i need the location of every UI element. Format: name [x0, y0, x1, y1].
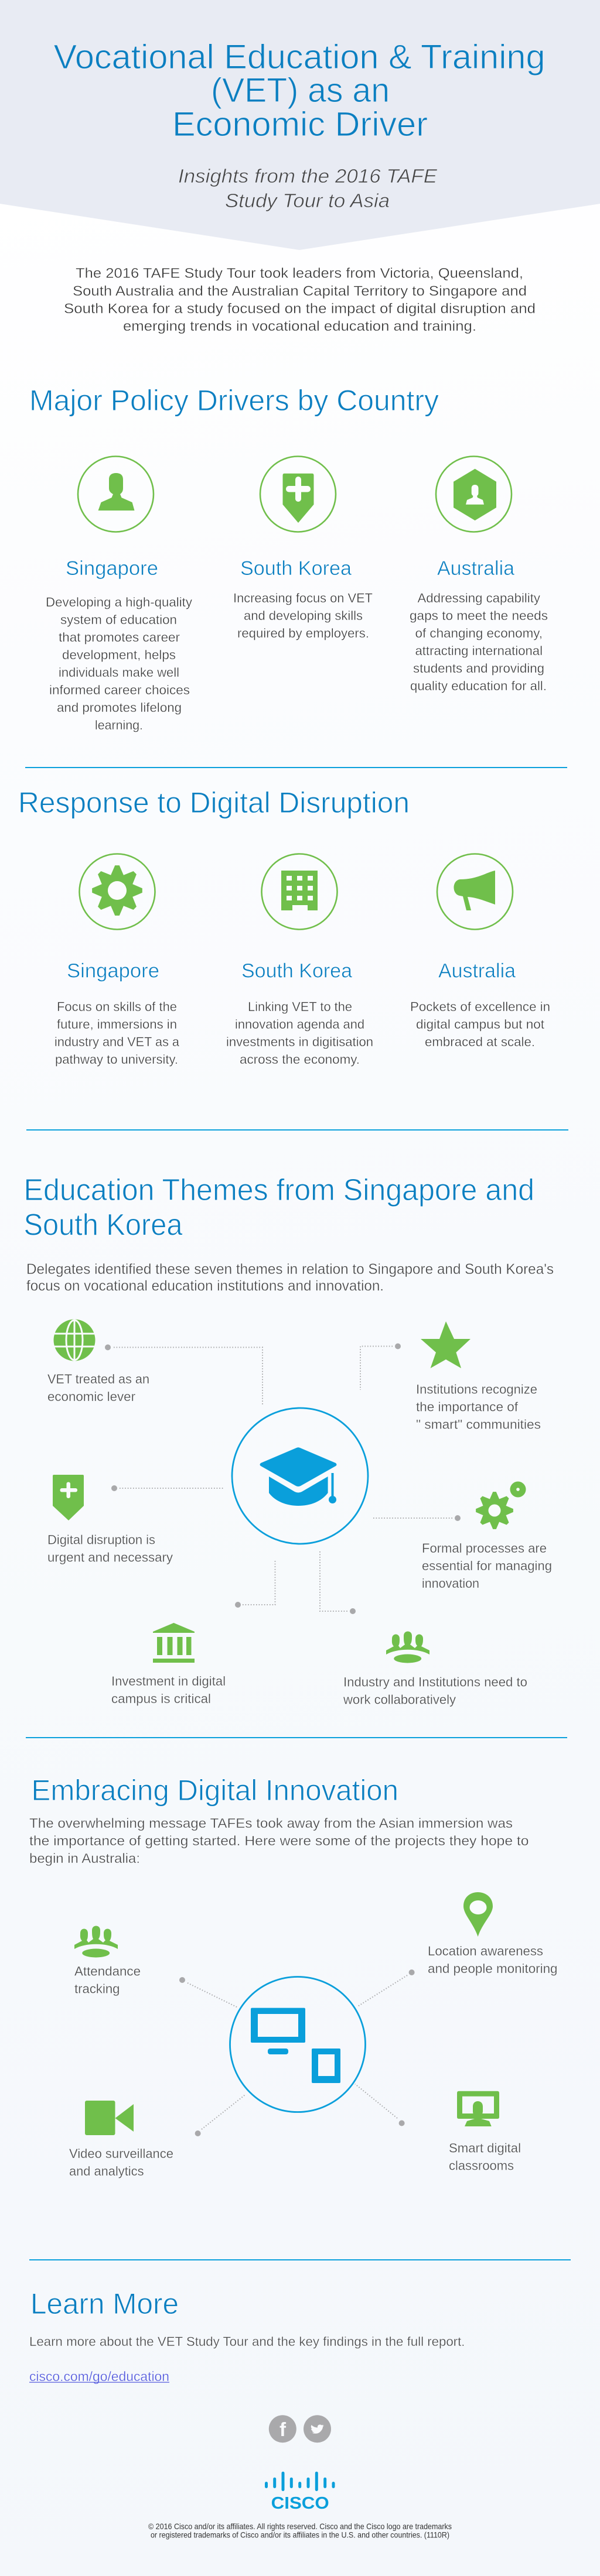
theme: digital campus: campus is critical [111, 1691, 211, 1706]
icon: gear in circle [80, 854, 155, 930]
panel: learn more [29, 2287, 465, 2540]
column: South Korea: across the economy. [240, 1052, 360, 1067]
icon: hexagon person in circle [436, 457, 512, 532]
theme: formal processes [373, 1481, 552, 1591]
theme: smart communities: Institutions recognize [416, 1382, 537, 1397]
icon: facebook: f [279, 2419, 287, 2440]
intro text: begin in Australia: [29, 1851, 140, 1866]
column: South Korea: required by employers. [237, 626, 369, 640]
column: Singapore: industry and VET as a [54, 1034, 180, 1049]
theme: smart communities: " smart" communities [416, 1417, 541, 1432]
panel: embracing digital innovation [29, 1774, 558, 2178]
icon: person in circle [78, 457, 154, 532]
icon: bank building [153, 1623, 195, 1663]
cisco logo [265, 2472, 335, 2513]
icon: star [421, 1321, 471, 1368]
heading [23, 1173, 534, 1242]
theme: collaboration: Industry and Institutions need to [343, 1674, 527, 1690]
link: cisco.com/go/education [29, 2369, 169, 2384]
item: location awareness [357, 1892, 558, 2006]
icon: facebook [269, 2415, 296, 2443]
heading: Major Policy Drivers by Country [29, 384, 439, 417]
column: South Korea: and developing skills [244, 608, 363, 623]
theme: smart communities [360, 1321, 541, 1432]
intro paragraph: South Australia and the Australian Capital Territory to Singapore and [73, 283, 527, 299]
column: Australia: of changing economy, [415, 626, 543, 640]
column: Australia: Australia [437, 557, 514, 580]
theme: collaboration: work collaboratively [343, 1692, 456, 1707]
heading: South Korea [23, 1208, 183, 1242]
column: South Korea: innovation agenda and [235, 1017, 364, 1032]
icon: building in circle [261, 854, 338, 930]
copyright [148, 2522, 452, 2540]
center circle with graduation cap [232, 1408, 368, 1544]
theme: digital campus [111, 1561, 275, 1706]
icon: shield plus [53, 1475, 84, 1520]
panel: major policy drivers by country [29, 384, 548, 732]
item: smart classrooms [355, 2084, 521, 2173]
item: location awareness: and people monitoring [428, 1961, 558, 1976]
column: Singapore: Singapore [67, 960, 159, 982]
item: video surveillance [69, 2095, 246, 2178]
theme: formal processes: innovation [422, 1576, 479, 1591]
icon: twitter [304, 2415, 331, 2443]
column: Australia: Australia [438, 960, 516, 982]
column: Singapore: Focus on skills of the [57, 999, 177, 1014]
column: Singapore: Singapore [66, 557, 158, 580]
center circle with devices [230, 1976, 366, 2112]
icon: map pin [463, 1892, 493, 1937]
column: Australia [410, 960, 550, 1049]
icon: presenter on screen [457, 2091, 499, 2126]
theme: digital campus: Investment in digital [111, 1674, 226, 1688]
column: Singapore: learning. [95, 718, 143, 732]
item: smart classrooms: classrooms [449, 2158, 514, 2173]
column: Singapore: that promotes career [59, 630, 180, 645]
subtitle [178, 165, 438, 211]
column: Singapore: future, immersions in [57, 1017, 177, 1032]
copyright: or registered trademarks of Cisco and/or its affiliates in the U.S. and other countries. (1110R) [151, 2530, 449, 2540]
theme: collaboration [320, 1551, 527, 1707]
theme: formal processes: essential for managing [422, 1558, 552, 1573]
column: South Korea: South Korea [241, 960, 352, 982]
item: attendance tracking [74, 1926, 237, 2008]
theme: economic lever: economic lever [47, 1389, 135, 1404]
column: South Korea: Increasing focus on VET [233, 591, 373, 605]
column: Australia: embraced at scale. [425, 1034, 535, 1049]
column: South Korea: investments in digitisation [226, 1034, 373, 1049]
icon: people around table [386, 1631, 429, 1663]
title [54, 38, 545, 143]
column: Australia: Pockets of excellence in [410, 999, 550, 1014]
intro text [29, 1815, 529, 1866]
column: South Korea: South Korea [240, 557, 352, 580]
intro paragraph: South Korea for a study focused on the impact of digital disruption and [64, 301, 536, 317]
column: Singapore: Developing a high-quality [46, 595, 192, 609]
theme: formal processes: Formal processes are [422, 1541, 547, 1556]
column: Singapore: system of education [60, 612, 177, 627]
intro paragraph: emerging trends in vocational education and training. [123, 318, 476, 334]
column: Singapore: individuals make well [59, 665, 179, 680]
column: Australia: attracting international [415, 643, 543, 658]
icon: video camera [85, 2101, 134, 2135]
copyright: © 2016 Cisco and/or its affiliates. All rights reserved. Cisco and the Cisco logo are trademarks [148, 2522, 452, 2531]
column: Singapore: pathway to university. [55, 1052, 178, 1067]
item: smart classrooms: Smart digital [449, 2140, 521, 2156]
theme: smart communities: the importance of [416, 1399, 519, 1414]
intro paragraph: The 2016 TAFE Study Tour took leaders from Victoria, Queensland, [76, 266, 523, 281]
icon: megaphone in circle [437, 854, 513, 930]
intro text: The overwhelming message TAFEs took away from the Asian immersion was [29, 1815, 513, 1831]
icon: shield plus in circle [260, 457, 336, 532]
intro text: focus on vocational education institutions and innovation. [26, 1277, 384, 1294]
column: Australia: gaps to meet the needs [410, 608, 548, 623]
column: South Korea [233, 557, 373, 640]
cisco logo: CISCO [271, 2494, 329, 2513]
column: Singapore: and promotes lifelong [57, 700, 182, 715]
intro text: Delegates identified these seven themes in relation to Singapore and South Korea's [26, 1261, 554, 1277]
title: (VET) as an [211, 71, 390, 109]
intro paragraph [64, 266, 536, 334]
item: location awareness: Location awareness [428, 1944, 543, 1958]
icon: globe [54, 1320, 95, 1361]
column: South Korea [226, 960, 373, 1067]
column: Singapore: development, helps [62, 648, 176, 662]
title: Economic Driver [172, 105, 428, 143]
theme: economic lever: VET treated as an [47, 1372, 149, 1386]
column: Australia: digital campus but not [416, 1017, 544, 1032]
icon: people around table [74, 1926, 118, 1958]
heading: Response to Digital Disruption [18, 786, 410, 819]
column: Australia: Addressing capability [417, 591, 540, 605]
theme: digital disruption: urgent and necessary [47, 1550, 173, 1564]
panel: header banner [0, 0, 600, 250]
theme: economic lever [47, 1320, 262, 1405]
column: Australia: quality education for all. [410, 679, 547, 693]
heading: Education Themes from Singapore and [23, 1173, 534, 1207]
text: Learn more about the VET Study Tour and the key findings in the full report. [29, 2334, 465, 2349]
panel: response to digital disruption [18, 786, 550, 1067]
column: Australia: students and providing [413, 661, 544, 676]
heading: Embracing Digital Innovation [32, 1774, 398, 1807]
item: attendance tracking: Attendance [74, 1964, 141, 1979]
theme: digital disruption: Digital disruption is [47, 1533, 155, 1547]
subtitle: Study Tour to Asia [225, 190, 390, 211]
item: video surveillance: Video surveillance [69, 2146, 173, 2161]
item: attendance tracking: tracking [74, 1981, 120, 1996]
column: Australia [410, 557, 548, 693]
theme: digital disruption [47, 1475, 223, 1564]
intro text [26, 1261, 554, 1294]
item: video surveillance: and analytics [69, 2164, 144, 2178]
column: Singapore [46, 557, 192, 732]
column: South Korea: Linking VET to the [248, 999, 352, 1014]
heading: Learn More [30, 2287, 179, 2320]
title: Vocational Education & Training [54, 38, 545, 76]
intro text: the importance of getting started. Here were some of the projects they hope to [29, 1833, 529, 1848]
icon: gears [476, 1481, 526, 1529]
panel: education themes [23, 1173, 554, 1707]
subtitle: Insights from the 2016 TAFE [178, 165, 438, 187]
column: Singapore [54, 960, 180, 1067]
column: Singapore: informed career choices [49, 683, 190, 697]
